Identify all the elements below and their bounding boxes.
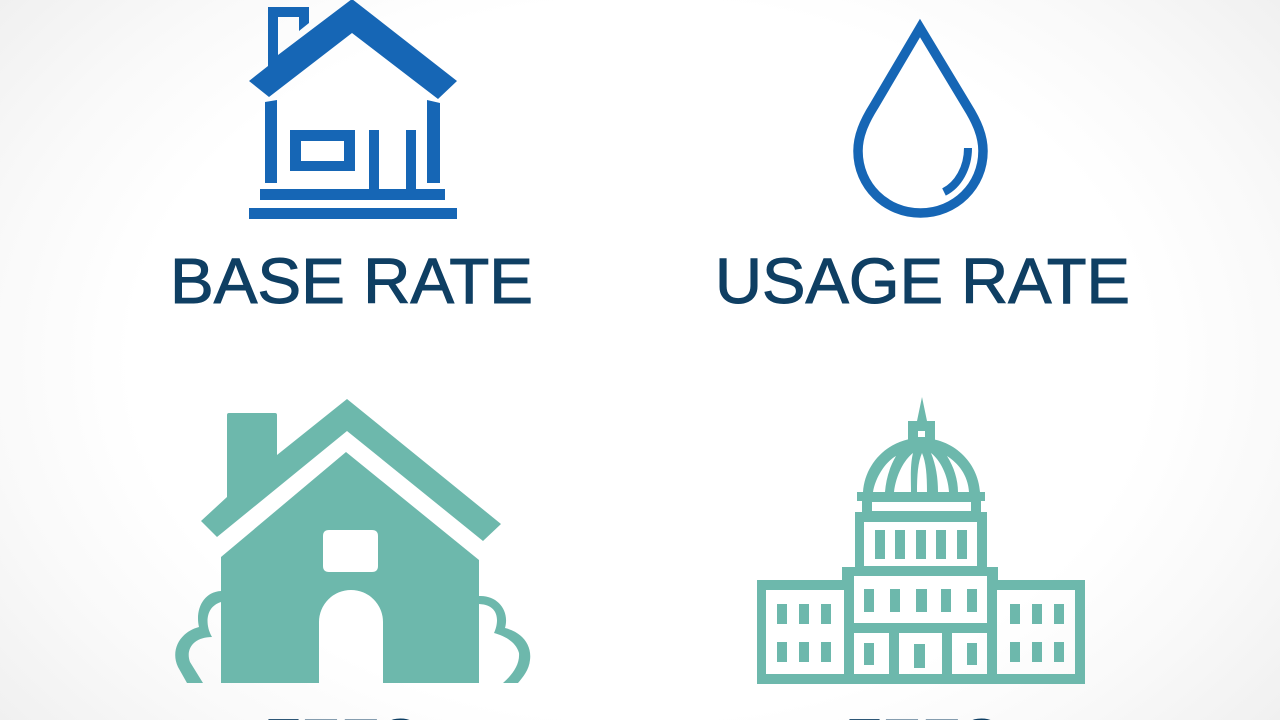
house base bar — [249, 208, 457, 219]
capitol dome with ribs — [863, 438, 980, 492]
panel: local fees — [175, 399, 530, 720]
heading: base rate: BASE RATE — [170, 245, 533, 317]
panel: base rate — [170, 0, 533, 317]
teal roof and chimney — [201, 399, 501, 541]
icon: capitol building — [757, 397, 1085, 684]
house roof and chimney — [249, 0, 457, 99]
central block windows — [864, 589, 977, 668]
house right wall — [427, 100, 440, 183]
drop outline — [858, 28, 983, 213]
capitol wings and central block — [757, 567, 1085, 684]
icon: teal solid house — [175, 399, 530, 683]
capitol drum — [862, 501, 981, 512]
capitol spire — [917, 397, 927, 421]
house door posts and floor — [260, 130, 445, 200]
teal house body with window and door — [221, 452, 479, 683]
upper storey windows — [875, 530, 967, 559]
house left wall — [265, 100, 277, 183]
house window — [290, 130, 355, 171]
capitol lantern — [908, 421, 935, 440]
left bush — [175, 591, 221, 683]
panel: government fees — [757, 397, 1085, 720]
heading: usage rate: USAGE RATE — [715, 245, 1130, 317]
capitol cornice — [857, 492, 985, 501]
icon: blue outline house — [249, 0, 457, 219]
capitol upper storey — [855, 512, 987, 567]
panel: usage rate — [715, 28, 1130, 317]
left wing windows — [777, 604, 831, 662]
right wing windows — [1010, 604, 1064, 662]
right bush — [479, 596, 530, 683]
icon: water drop — [858, 28, 983, 213]
drop highlight — [944, 148, 968, 192]
